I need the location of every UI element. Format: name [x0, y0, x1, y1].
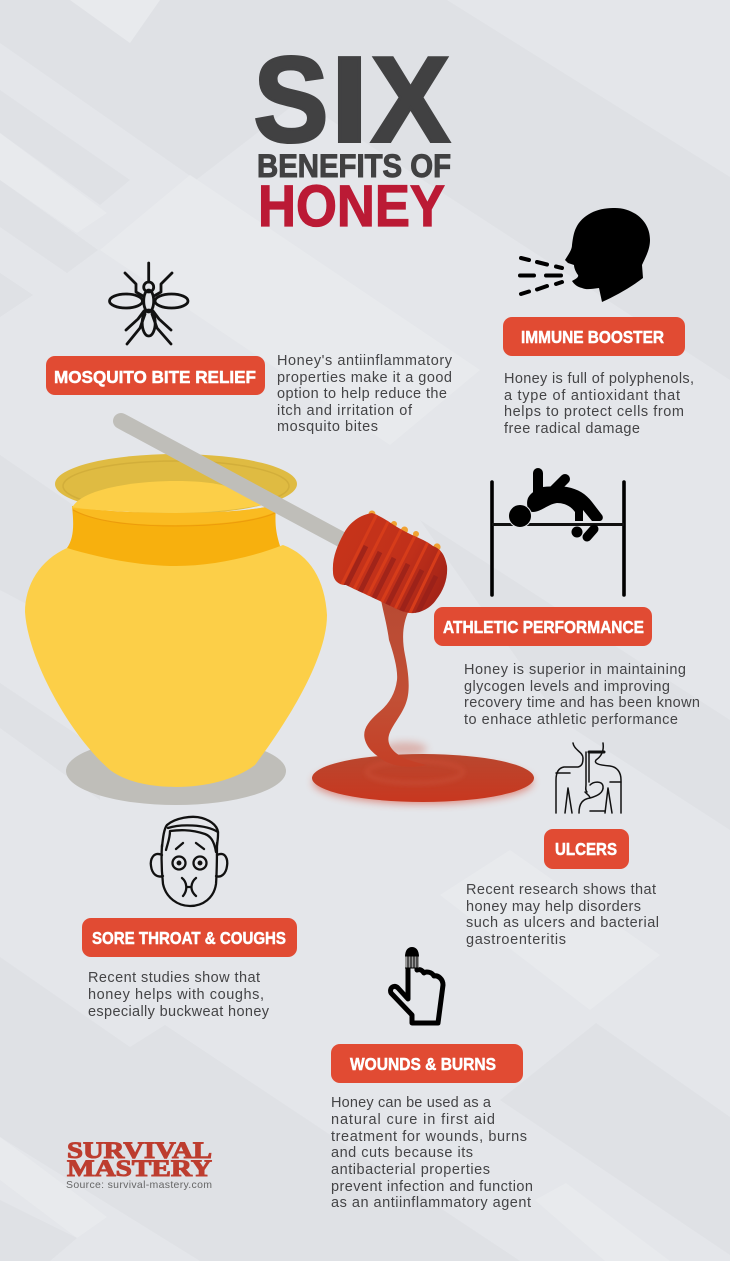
text: immune description: helps to protect cells from — [504, 404, 684, 420]
title word: SIX: I — [330, 32, 368, 168]
panel: sore throat and coughs — [82, 817, 297, 1020]
logo: survival mastery: MASTERY — [67, 1156, 212, 1181]
honey stream — [364, 600, 427, 767]
text: ulcers description: Recent research shows that — [466, 882, 656, 898]
panel: athletic performance — [434, 473, 700, 728]
jar body — [25, 545, 327, 787]
jar neck — [67, 505, 283, 572]
text: athletic description: glycogen levels and improving — [464, 679, 670, 695]
label: mosquito bite relief — [46, 356, 265, 395]
jar shadow — [66, 737, 286, 805]
text: immune description: a type of antioxidant that — [504, 388, 680, 404]
text: wounds description — [331, 1095, 533, 1211]
text: athletic description — [464, 662, 700, 728]
icon: high jumper — [492, 473, 624, 595]
text: sore throat description — [88, 970, 270, 1020]
panel: mosquito bite relief — [46, 263, 453, 435]
label: sore throat and coughs: SORE THROAT & COUGHS — [92, 928, 286, 948]
text: athletic description: Honey is superior in maintaining — [464, 662, 686, 678]
title — [254, 32, 451, 239]
text: sore throat description: Recent studies show that — [88, 970, 260, 986]
text: mosquito description: properties make it a good — [277, 370, 452, 386]
label: athletic performance: ATHLETIC PERFORMANCE — [443, 617, 644, 637]
text: immune description: free radical damage — [504, 421, 640, 437]
text: mosquito description — [277, 353, 453, 435]
label: wounds and burns: WOUNDS & BURNS — [350, 1054, 496, 1074]
logo and source — [66, 1138, 212, 1191]
text: sore throat description: especially buckweat honey — [88, 1004, 270, 1020]
panel: immune booster — [503, 208, 694, 437]
text: wounds description: as an antiinflammatory agent — [331, 1195, 531, 1211]
label: sore throat and coughs — [82, 918, 297, 957]
text: athletic description: recovery time and has been known — [464, 695, 700, 711]
text: ulcers description — [466, 882, 659, 948]
icon: head breathing out — [520, 208, 650, 302]
illustration: honey dipper — [121, 421, 534, 804]
text: wounds description: antibacterial properties — [331, 1162, 490, 1178]
jar rim — [55, 454, 297, 514]
label: ulcers — [544, 829, 629, 869]
text: mosquito description: option to help reduce the — [277, 386, 447, 402]
title word: SIX: S — [254, 32, 328, 168]
text: sore throat description: honey helps with coughs, — [88, 987, 264, 1003]
text: athletic description: to enhace athletic performance — [464, 712, 678, 728]
text: wounds description: Honey can be used as a — [331, 1095, 492, 1111]
icon: bandaged finger hand — [391, 947, 443, 1023]
label: immune booster: IMMUNE BOOSTER — [521, 327, 664, 347]
text: immune description: Honey is full of polyphenols, — [504, 371, 694, 387]
icon: digestive tract — [556, 743, 621, 813]
label: immune booster — [503, 317, 685, 356]
label: wounds and burns — [331, 1044, 523, 1083]
logo: survival mastery: SURVIVAL — [67, 1138, 212, 1163]
text: wounds description: prevent infection and function — [331, 1179, 533, 1195]
title word: SIX — [254, 32, 450, 168]
text: ulcers description: gastroenteritis — [466, 932, 566, 948]
text: mosquito description: itch and irritation of — [277, 403, 413, 419]
title word: SIX: X — [371, 32, 450, 168]
text: wounds description: treatment for wounds, burns — [331, 1129, 527, 1145]
logo: survival mastery — [67, 1138, 212, 1181]
panel: wounds and burns — [331, 947, 533, 1211]
honey puddle — [312, 742, 534, 804]
text: mosquito description: Honey's antiinflammatory — [277, 353, 453, 369]
dipper handle — [121, 421, 348, 543]
icon: coughing face — [151, 817, 227, 906]
text: mosquito description: mosquito bites — [277, 419, 378, 435]
panel: ulcers — [466, 743, 659, 948]
label: mosquito bite relief: MOSQUITO BITE RELIEF — [54, 367, 256, 387]
text: ulcers description: such as ulcers and bacterial — [466, 915, 659, 931]
title word: HONEY: HONEY — [258, 174, 445, 239]
title line: BENEFITS OF: BENEFITS OF — [257, 148, 451, 184]
source line: Source: survival-mastery.com — [66, 1179, 212, 1191]
text: wounds description: natural cure in first aid — [331, 1112, 495, 1128]
dipper head — [332, 513, 448, 614]
text: wounds description: and cuts because its — [331, 1145, 473, 1161]
text: ulcers description: honey may help disorders — [466, 899, 641, 915]
label: ulcers: ULCERS — [555, 839, 617, 859]
honey drips — [368, 510, 441, 551]
icon: mosquito — [110, 263, 188, 344]
text: immune description — [504, 371, 694, 437]
illustration: honey jar — [25, 454, 327, 805]
honey surface — [72, 481, 262, 513]
label: athletic performance — [434, 607, 652, 646]
